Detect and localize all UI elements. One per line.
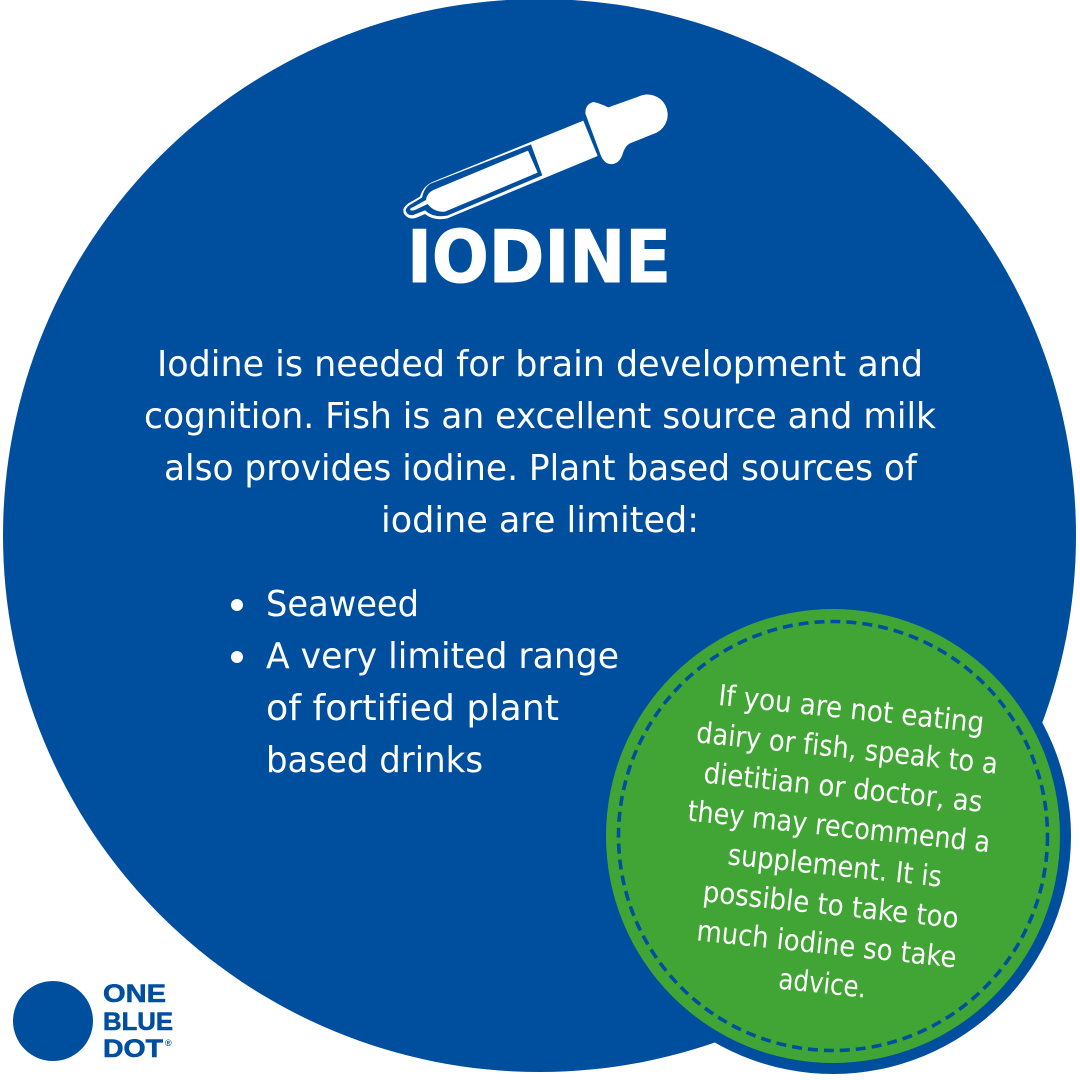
callout text: dietitian or doctor, as <box>702 756 984 819</box>
callout text <box>670 676 1004 1016</box>
text block: introduction: Iodine is needed for brain development and <box>157 344 923 385</box>
callout text: they may recommend a <box>686 794 992 859</box>
logo: One Blue Dot: DOT <box>103 1035 163 1063</box>
logo: One Blue Dot: ® <box>165 1038 172 1048</box>
logo: One Blue Dot: ONE <box>103 980 166 1008</box>
title: IODINE <box>407 215 671 299</box>
callout text: dairy or fish, speak to a <box>695 715 1000 781</box>
bullet list: plant sources: A very limited range <box>266 636 619 677</box>
icon: iodine dropper <box>403 94 668 219</box>
text block: introduction: also provides iodine. Plant based sources of <box>164 448 918 489</box>
callout: supplement advice <box>595 598 1071 1074</box>
logo: One Blue Dot: BLUE <box>103 1008 173 1036</box>
bullet list: plant sources: based drinks <box>266 740 483 781</box>
text block: introduction: cognition. Fish is an excellent source and milk <box>144 396 936 437</box>
text block: introduction <box>144 344 936 541</box>
text block: introduction: iodine are limited: <box>381 500 699 541</box>
bullet list: plant sources: of fortified plant <box>266 688 559 729</box>
callout text: If you are not eating <box>717 678 986 740</box>
callout text: advice. <box>777 962 868 1005</box>
callout text: possible to take too <box>701 874 960 935</box>
callout text: much iodine so take <box>695 913 958 974</box>
logo: One Blue Dot <box>13 980 173 1063</box>
bullet list: plant sources <box>231 584 619 781</box>
callout text: supplement. It is <box>726 837 944 894</box>
bullet list: plant sources: Seaweed <box>266 584 419 625</box>
